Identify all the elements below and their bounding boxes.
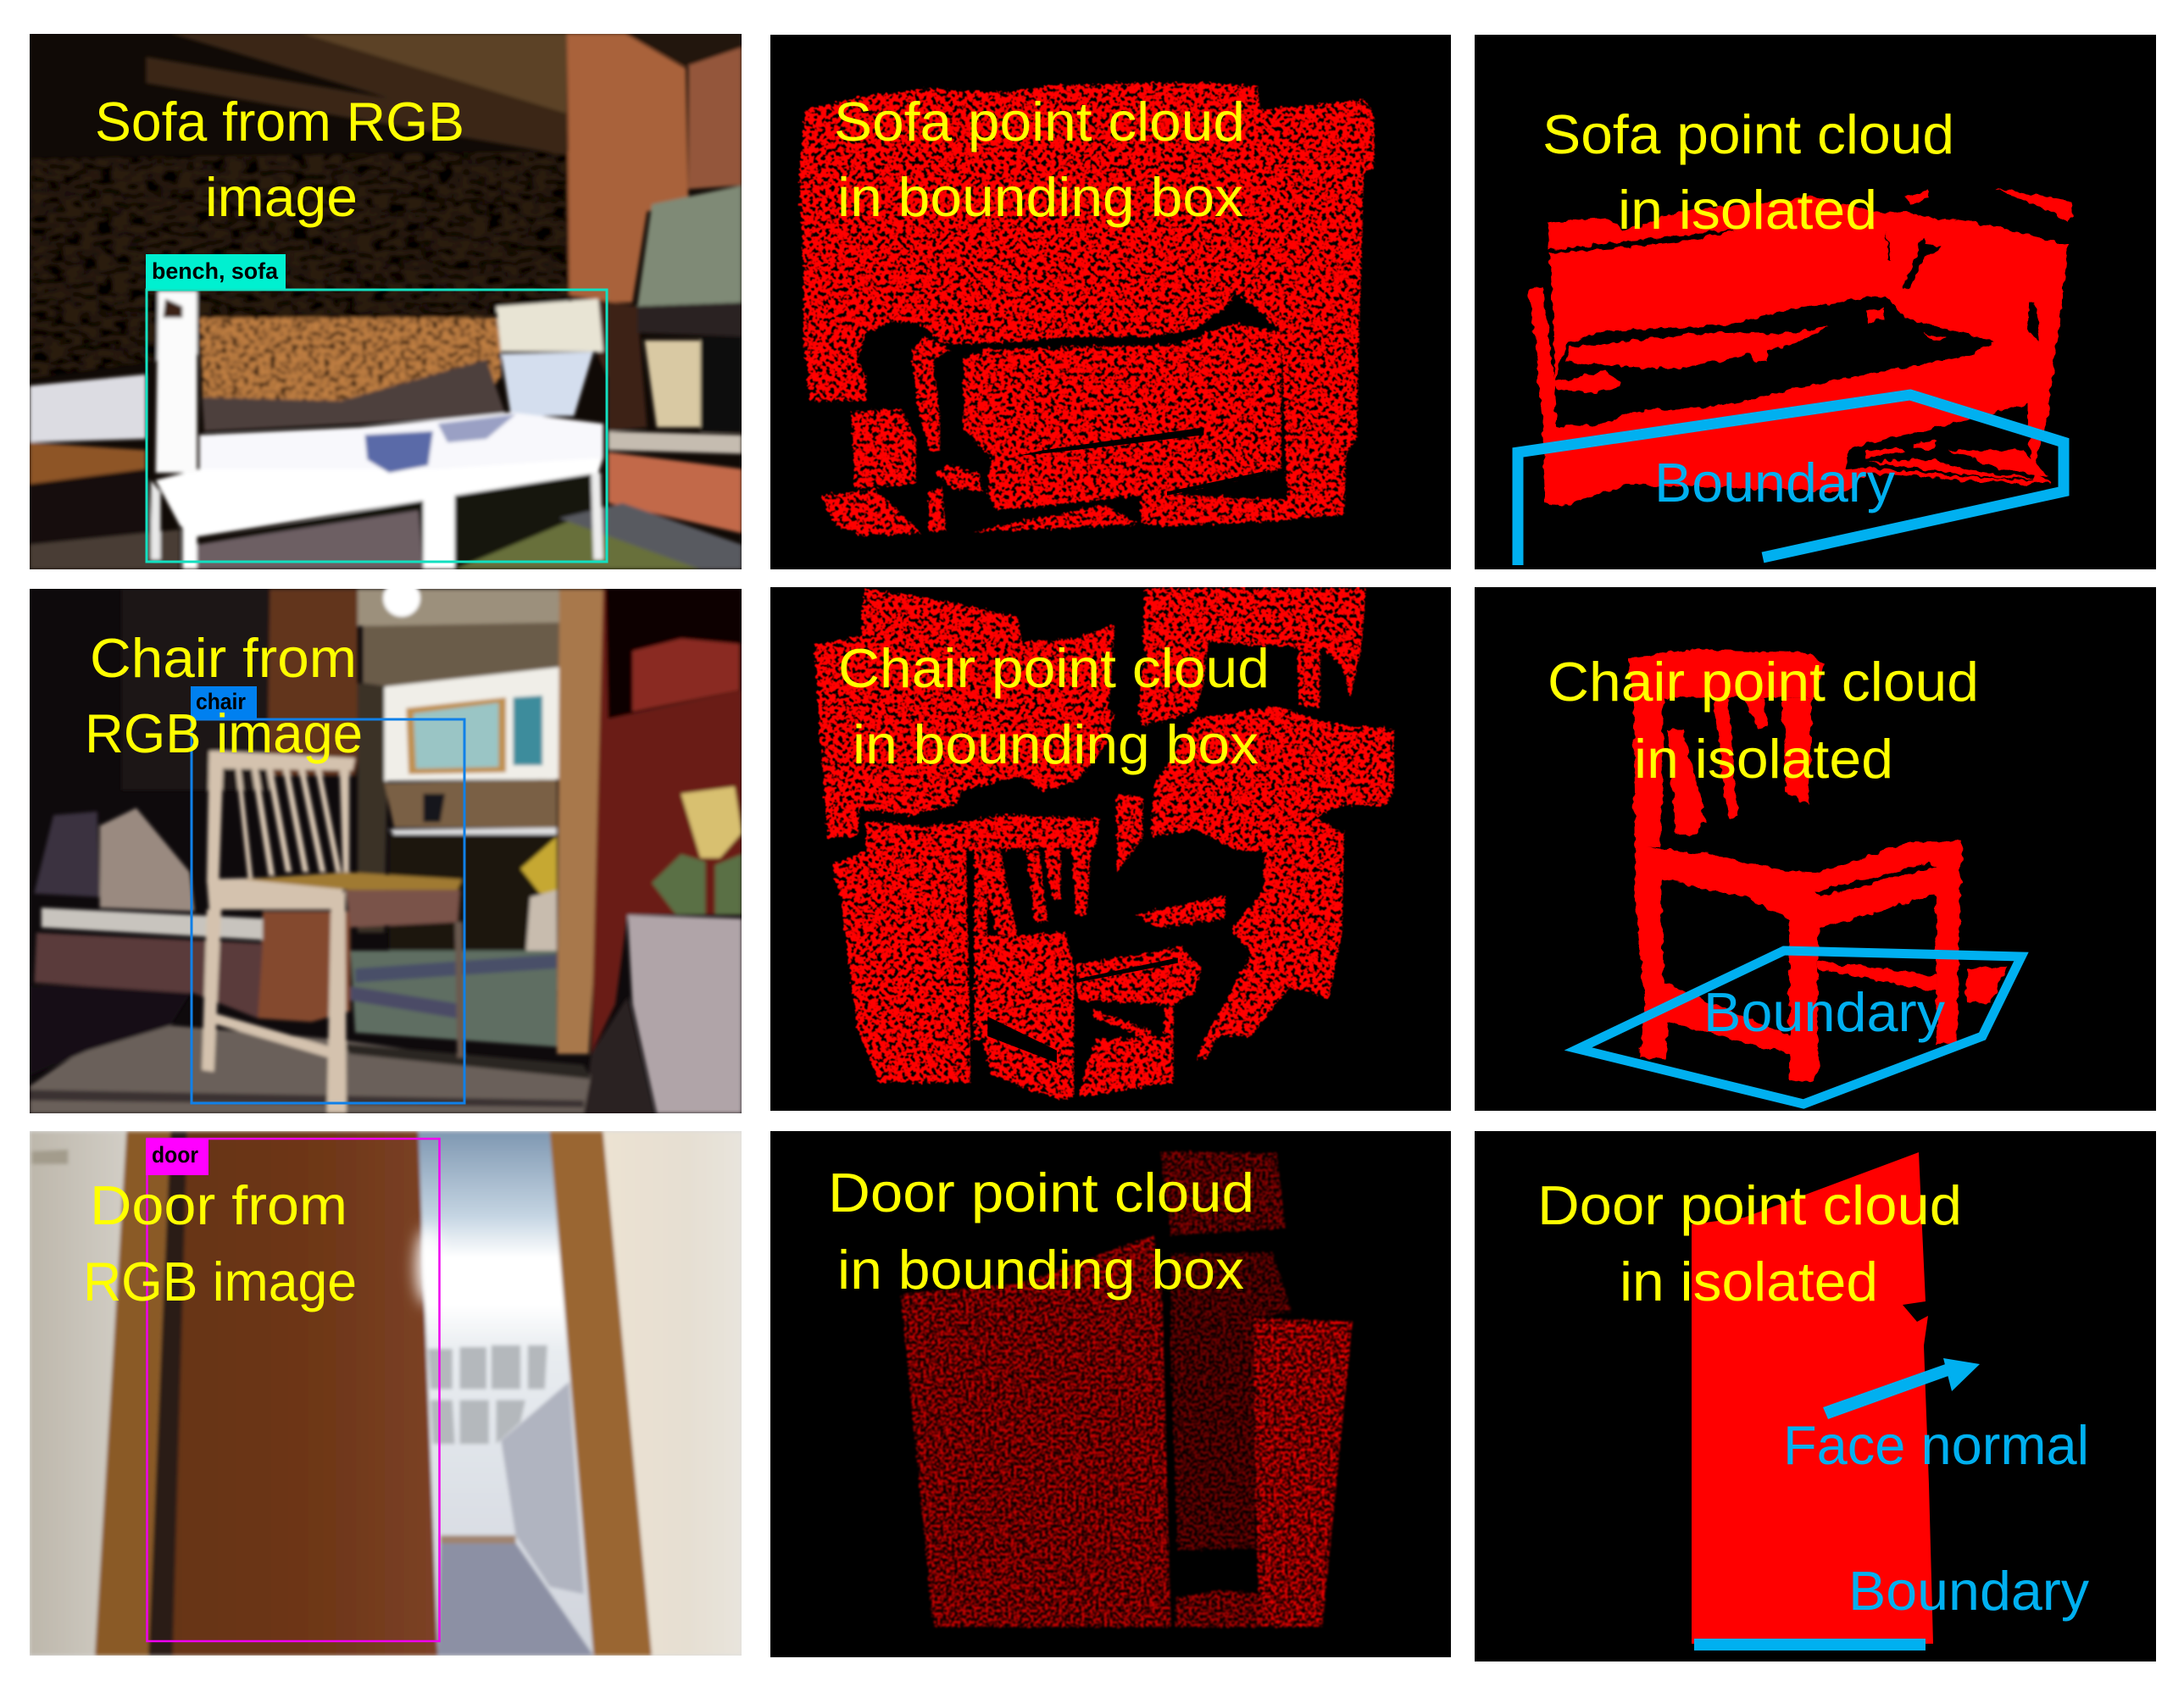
bounding box: door xyxy=(146,1139,439,1641)
point cloud gaps xyxy=(987,957,1178,1063)
point cloud: chair bounding box xyxy=(814,589,1394,1101)
caption: chair point cloud in bounding box: in bounding box xyxy=(853,713,1259,775)
caption: chair point cloud in bounding box xyxy=(838,637,1270,775)
caption: sofa point cloud isolated: Sofa point cloud xyxy=(1542,103,1954,165)
label: boundary: Boundary xyxy=(1654,452,1896,513)
caption: sofa point cloud isolated xyxy=(1545,114,1951,230)
caption: sofa from RGB image: Sofa from RGB xyxy=(95,91,464,153)
bounding box: bench, sofa: bench, sofa xyxy=(152,258,279,284)
label: face normal: Face normal xyxy=(1783,1414,2089,1476)
caption: chair from RGB image xyxy=(85,627,363,764)
caption: chair point cloud isolated xyxy=(1548,651,1979,790)
point cloud: door bounding box xyxy=(901,1151,1353,1627)
boundary line: door xyxy=(1694,1639,1926,1650)
point cloud gaps xyxy=(1018,427,1266,496)
panel: door RGB image xyxy=(30,1131,742,1656)
caption: chair point cloud isolated: in isolated xyxy=(1634,728,1893,790)
caption: door from RGB image: RGB image xyxy=(83,1251,357,1312)
caption: sofa from RGB image: image xyxy=(205,166,358,228)
boundary polygon: chair xyxy=(1578,951,2021,1104)
caption: sofa point cloud isolated: in isolated xyxy=(1618,179,1877,241)
glare xyxy=(416,1229,440,1305)
caption: sofa point cloud in bounding box xyxy=(834,91,1245,228)
panel: sofa point cloud isolated xyxy=(1475,35,2156,569)
caption: door point cloud isolated: Door point cloud xyxy=(1537,1174,1962,1236)
panel: chair RGB image xyxy=(30,580,742,1113)
point cloud: sofa bounding box xyxy=(799,82,1375,535)
boundary line: sofa xyxy=(1518,395,2064,565)
caption: chair from RGB image: RGB image xyxy=(85,702,363,764)
bounding box: chair: chair xyxy=(196,689,246,714)
caption: sofa point cloud in bounding box: Sofa point cloud xyxy=(834,91,1245,153)
bounding box: chair xyxy=(191,686,464,1103)
panel: sofa RGB image xyxy=(30,33,742,569)
panel: chair point cloud in bounding box xyxy=(770,587,1451,1111)
label: boundary: Boundary xyxy=(1848,1560,2090,1622)
panel: door point cloud in bounding box xyxy=(770,1131,1451,1657)
isolated sofa point cloud xyxy=(1528,189,2074,507)
caption: door point cloud in bounding box: in bounding box xyxy=(837,1239,1244,1301)
caption: door point cloud isolated: in isolated xyxy=(1620,1251,1878,1312)
panel: door point cloud isolated xyxy=(1475,1131,2156,1661)
photo: door scene xyxy=(30,1132,742,1656)
caption: sofa from RGB image xyxy=(95,91,464,228)
photo: sofa scene xyxy=(30,33,742,569)
bounding box: door: door xyxy=(152,1142,198,1168)
panel: sofa point cloud in bounding box xyxy=(770,35,1451,569)
label: boundary: Boundary xyxy=(1703,981,1946,1043)
caption: door from RGB image xyxy=(83,1174,357,1312)
caption: sofa point cloud in bounding box: in bounding box xyxy=(837,166,1243,228)
isolated chair point cloud xyxy=(1628,649,2007,1081)
caption: chair point cloud isolated: Chair point cloud xyxy=(1548,651,1979,713)
caption: door point cloud isolated xyxy=(1537,1174,1962,1312)
caption: door point cloud in bounding box: Door point cloud xyxy=(828,1162,1254,1223)
caption: chair point cloud in bounding box: Chair point cloud xyxy=(838,637,1270,699)
caption: chair from RGB image: Chair from xyxy=(90,627,357,689)
caption: door point cloud in bounding box xyxy=(828,1162,1254,1301)
photo: chair scene xyxy=(30,580,742,1113)
bounding box: bench, sofa xyxy=(146,254,607,562)
panel: chair point cloud isolated xyxy=(1475,587,2156,1111)
isolated door point cloud xyxy=(1692,1152,1933,1644)
arrow: face normal xyxy=(1823,1358,1980,1419)
caption: door from RGB image: Door from xyxy=(90,1174,347,1236)
